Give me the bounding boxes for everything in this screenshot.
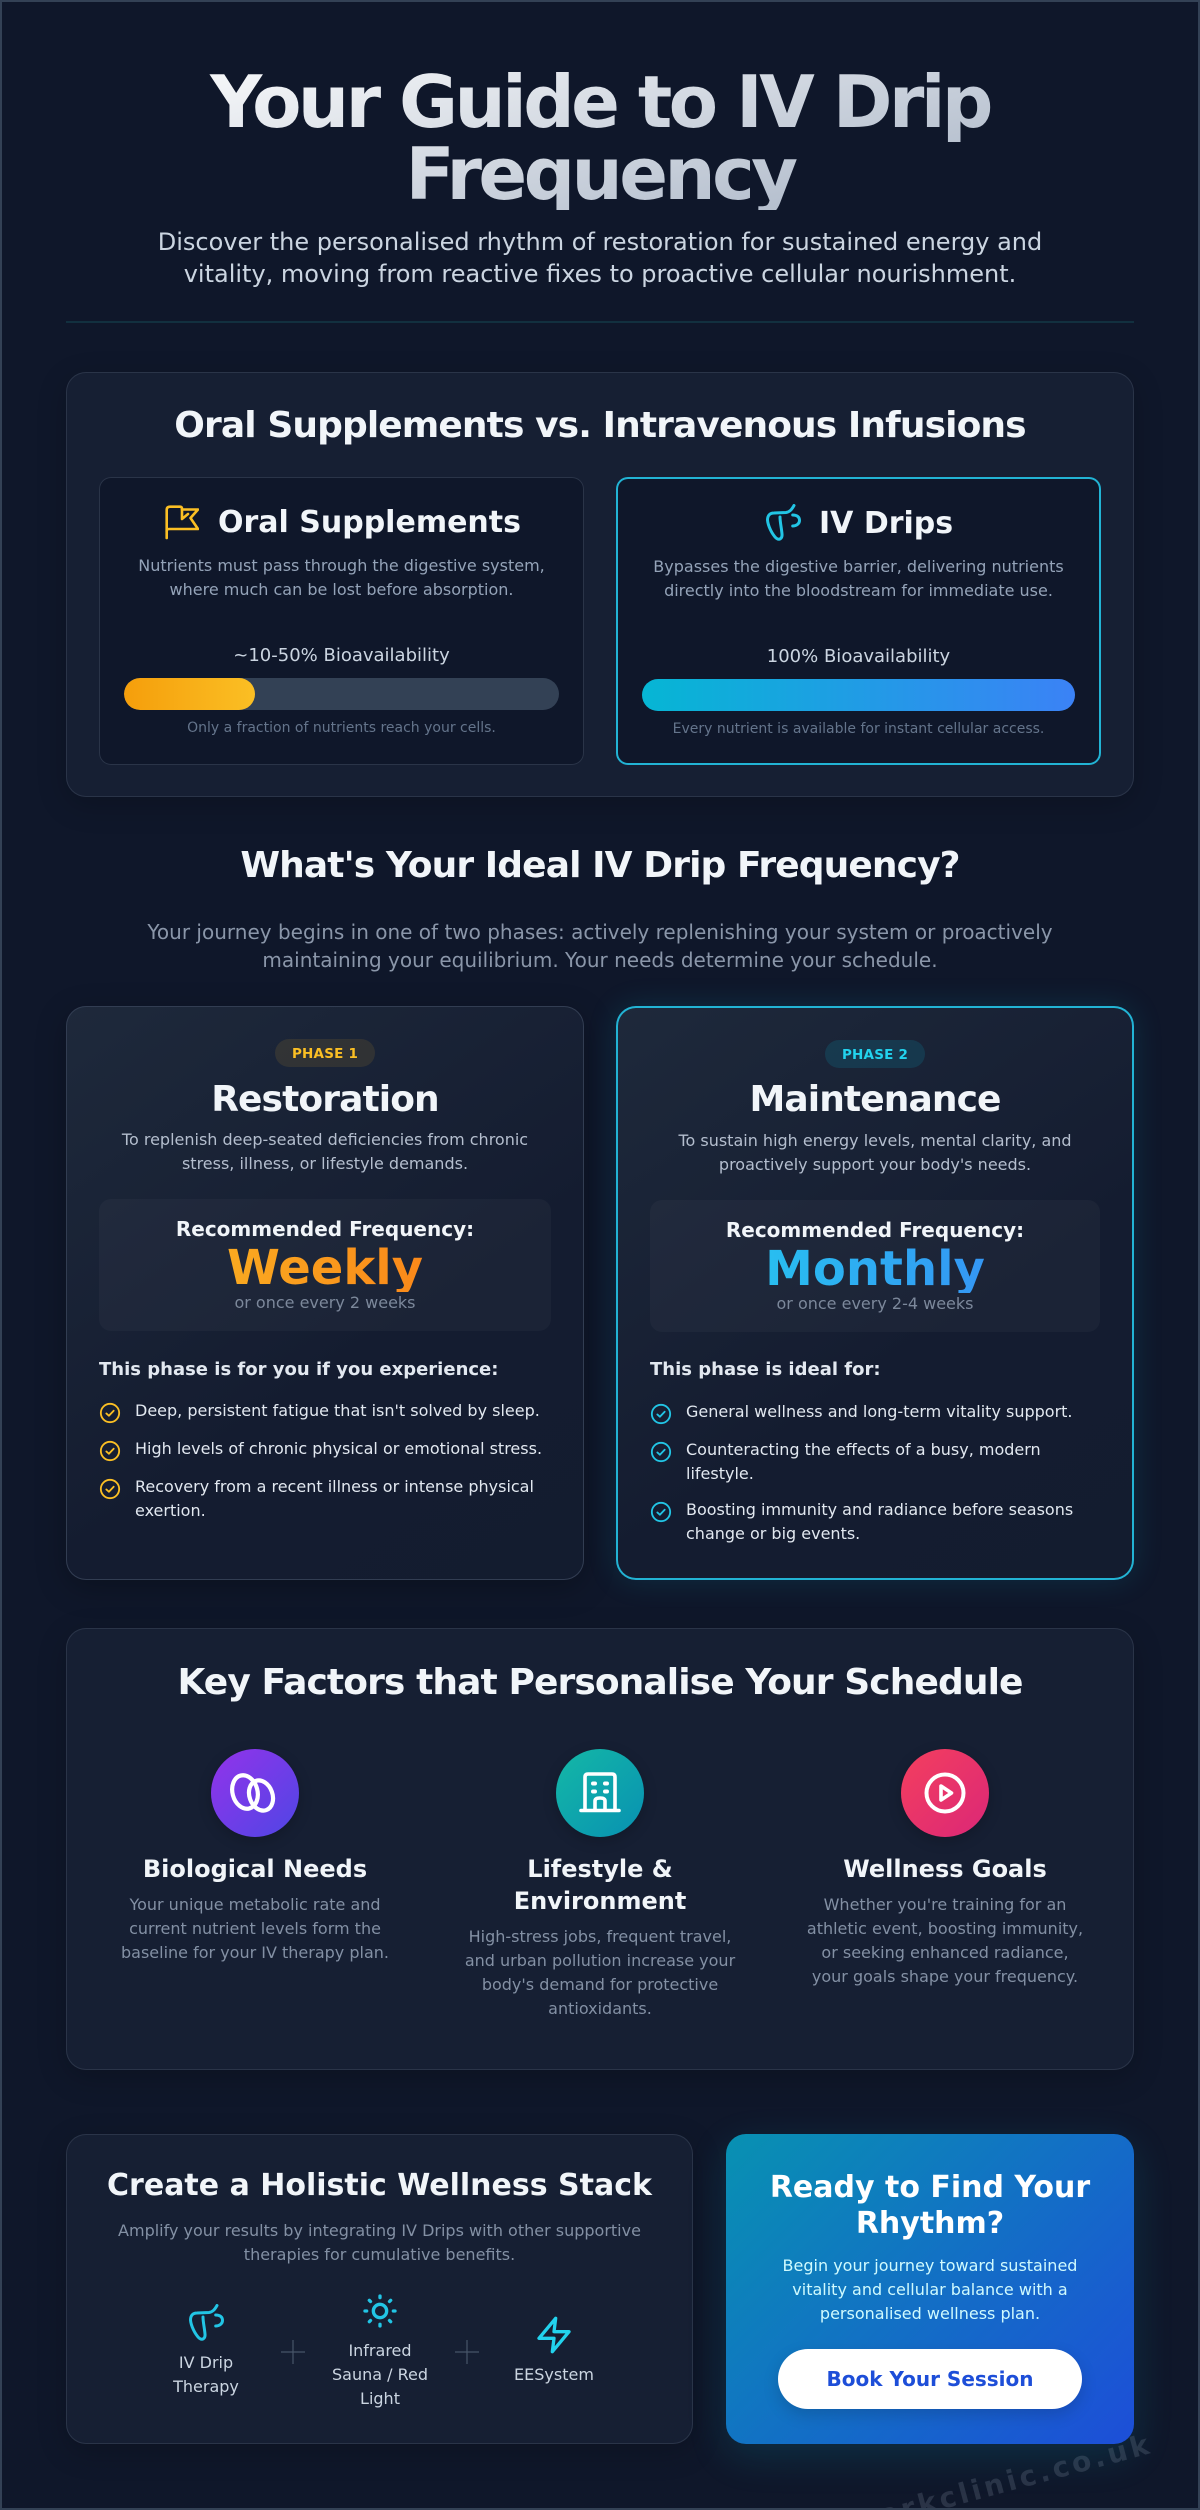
header: [66, 60, 1134, 323]
biological description: [121, 1894, 389, 1962]
lifestyle description: antioxidants.: [548, 1998, 652, 2018]
lifestyle description: and urban pollution increase your: [465, 1950, 735, 1970]
stack item: iv drip therapy: [173, 2304, 239, 2396]
frequency heading: What's Your Ideal IV Drip Frequency?: [240, 845, 960, 886]
phase 1 badge: PHASE 1: [292, 1046, 358, 1062]
maintenance list heading: This phase is ideal for:: [650, 1359, 881, 1380]
title: Your Guide to IV Drip: [210, 60, 990, 144]
item 1: General wellness and long-term vitality support.: [686, 1402, 1073, 1421]
biological description: current nutrient levels form the: [129, 1918, 381, 1938]
iv caption: Every nutrient is available for instant cellular access.: [673, 721, 1044, 737]
panel: call to action: [726, 2134, 1134, 2444]
stack heading: Create a Holistic Wellness Stack: [107, 2168, 652, 2203]
cta text: personalised wellness plan.: [820, 2304, 1040, 2322]
subtitle: [158, 228, 1042, 288]
phase 2 badge: [825, 1040, 925, 1068]
eesystem label: EESystem: [514, 2364, 594, 2384]
icon: iv drip: [766, 504, 801, 541]
monthly note: or once every 2-4 weeks: [776, 1294, 974, 1313]
infrared label: Infrared: [348, 2340, 412, 2360]
iv description: directly into the bloodstream for immediate use.: [664, 581, 1053, 600]
maintenance title: Maintenance: [749, 1079, 1001, 1120]
infrared label: [332, 2340, 428, 2408]
item 3: [100, 1477, 534, 1520]
factor: lifestyle and environment: [465, 1749, 736, 2018]
wellness description: Whether you're training for an: [824, 1894, 1066, 1914]
plus sign 1: [281, 2340, 305, 2364]
key factors heading: Key Factors that Personalise Your Schedule: [177, 1662, 1023, 1702]
panel: phase 1 restoration: [66, 1006, 584, 1580]
frequency intro: Your journey begins in one of two phases: actively replenishing your system or proactively: [147, 920, 1053, 944]
cta heading: Ready to Find Your: [770, 2170, 1090, 2204]
panel: key factors: [66, 1628, 1134, 2070]
card: iv drips: [616, 477, 1101, 765]
oral bioavailability bar: [124, 678, 559, 710]
biological description: Your unique metabolic rate and: [129, 1894, 381, 1914]
section heading: ideal frequency: [147, 845, 1053, 972]
recommended frequency box: [650, 1200, 1100, 1332]
wellness description: your goals shape your frequency.: [812, 1966, 1078, 1986]
phase 1 badge: [275, 1039, 375, 1067]
infrared label: Light: [360, 2388, 400, 2408]
lifestyle title: [514, 1855, 686, 1915]
frequency intro: [147, 920, 1053, 972]
wellness description: [807, 1894, 1083, 1986]
stack description: [118, 2220, 641, 2264]
lifestyle description: [465, 1926, 736, 2018]
iv drip label: IV Drip: [179, 2352, 233, 2372]
monthly value: Monthly: [765, 1241, 985, 1297]
frequency intro: maintaining your equilibrium. Your needs determine your schedule.: [262, 948, 938, 972]
icon: flag: [165, 505, 199, 540]
cta button: Book Your Session: [826, 2367, 1034, 2391]
cta text: Begin your journey toward sustained: [783, 2256, 1077, 2274]
restoration list heading: This phase is for you if you experience:: [99, 1358, 498, 1380]
weekly value: Weekly: [227, 1240, 423, 1296]
restoration description: To replenish deep-seated deficiencies from chronic: [122, 1130, 528, 1148]
cta heading: Rhythm?: [856, 2206, 1004, 2240]
restoration checklist: [100, 1401, 542, 1520]
factor: wellness goals: [807, 1749, 1083, 1986]
restoration title: Restoration: [211, 1078, 439, 1120]
icon: sun: [363, 2294, 397, 2328]
item 3: Recovery from a recent illness or intense physical: [135, 1477, 534, 1496]
wellness description: athletic event, boosting immunity,: [807, 1918, 1083, 1938]
card: oral supplements: [99, 477, 584, 765]
iv drip label: Therapy: [173, 2376, 239, 2396]
cta text: [783, 2256, 1077, 2322]
stack item: infrared sauna: [332, 2294, 428, 2408]
factor: biological needs: [121, 1749, 389, 1962]
subtitle: vitality, moving from reactive fixes to proactive cellular nourishment.: [184, 260, 1016, 288]
icon: iv drip: [189, 2304, 224, 2341]
item 3: exertion.: [135, 1501, 206, 1520]
maintenance description: To sustain high energy levels, mental clarity, and: [678, 1130, 1072, 1150]
iv description: [653, 557, 1064, 600]
lifestyle description: body's demand for protective: [482, 1974, 718, 1994]
oral description: where much can be lost before absorption.: [170, 580, 513, 599]
maintenance checklist: [650, 1402, 1073, 1543]
title: Frequency: [405, 132, 795, 216]
cta text: vitality and cellular balance with a: [792, 2280, 1068, 2298]
title: [66, 66, 1134, 210]
item 2: [650, 1440, 1041, 1483]
icon: rings: [211, 1749, 299, 1837]
icon: lightning bolt: [537, 2316, 571, 2354]
icon: building: [556, 1749, 644, 1837]
iv bioavailability bar: [642, 679, 1075, 711]
wellness title: Wellness Goals: [843, 1855, 1047, 1883]
frequency label: Recommended Frequency:: [726, 1218, 1024, 1242]
iv description: Bypasses the digestive barrier, delivering nutrients: [653, 557, 1064, 576]
restoration description: [122, 1130, 528, 1172]
subtitle: Discover the personalised rhythm of restoration for sustained energy and: [158, 228, 1042, 256]
phase 2 badge: PHASE 2: [842, 1047, 908, 1063]
restoration description: stress, illness, or lifestyle demands.: [182, 1154, 468, 1172]
item 1: Deep, persistent fatigue that isn't solved by sleep.: [135, 1401, 540, 1420]
item 3: [650, 1500, 1073, 1543]
iv heading: IV Drips: [819, 506, 953, 540]
oral heading: Oral Supplements: [218, 505, 521, 540]
biological title: Biological Needs: [143, 1855, 367, 1883]
frequency label: Recommended Frequency:: [176, 1217, 474, 1241]
lifestyle title: Environment: [514, 1887, 686, 1915]
comparison heading: Oral Supplements vs. Intravenous Infusions: [174, 405, 1026, 446]
lifestyle title: Lifestyle &: [527, 1855, 673, 1883]
weekly note: or once every 2 weeks: [234, 1293, 416, 1312]
item 2: lifestyle.: [686, 1464, 754, 1483]
oral description: Nutrients must pass through the digestive system,: [138, 556, 545, 575]
oral caption: Only a fraction of nutrients reach your cells.: [187, 720, 496, 736]
iv bioavailability label: 100% Bioavailability: [767, 646, 950, 667]
plus sign 2: [455, 2340, 479, 2364]
recommended frequency box: [99, 1199, 551, 1331]
weekly value: [99, 1244, 551, 1292]
iv drip label: [173, 2352, 239, 2396]
item 3: Boosting immunity and radiance before seasons: [686, 1500, 1073, 1519]
cta button: [778, 2349, 1082, 2409]
maintenance description: [678, 1130, 1072, 1174]
icon: play target: [901, 1749, 989, 1837]
stack description: therapies for cumulative benefits.: [244, 2244, 515, 2264]
item 3: change or big events.: [686, 1524, 860, 1543]
lifestyle description: High-stress jobs, frequent travel,: [469, 1926, 731, 1946]
wellness description: or seeking enhanced radiance,: [821, 1942, 1069, 1962]
stack description: Amplify your results by integrating IV Drips with other supportive: [118, 2220, 641, 2240]
oral description: [138, 556, 545, 599]
oral bioavailability label: ~10-50% Bioavailability: [233, 645, 450, 666]
monthly value: [650, 1245, 1100, 1293]
item 2: Counteracting the effects of a busy, modern: [686, 1440, 1041, 1459]
stack item: eesystem: [514, 2316, 594, 2384]
panel: phase 2 maintenance: [616, 1006, 1134, 1580]
biological description: baseline for your IV therapy plan.: [121, 1942, 389, 1962]
cta heading: [770, 2170, 1090, 2240]
panel: wellness stack: [66, 2134, 693, 2444]
maintenance description: proactively support your body's needs.: [719, 1154, 1031, 1174]
panel: oral vs intravenous comparison: [66, 372, 1134, 797]
infrared label: Sauna / Red: [332, 2364, 428, 2384]
item 2: High levels of chronic physical or emotional stress.: [135, 1439, 542, 1458]
